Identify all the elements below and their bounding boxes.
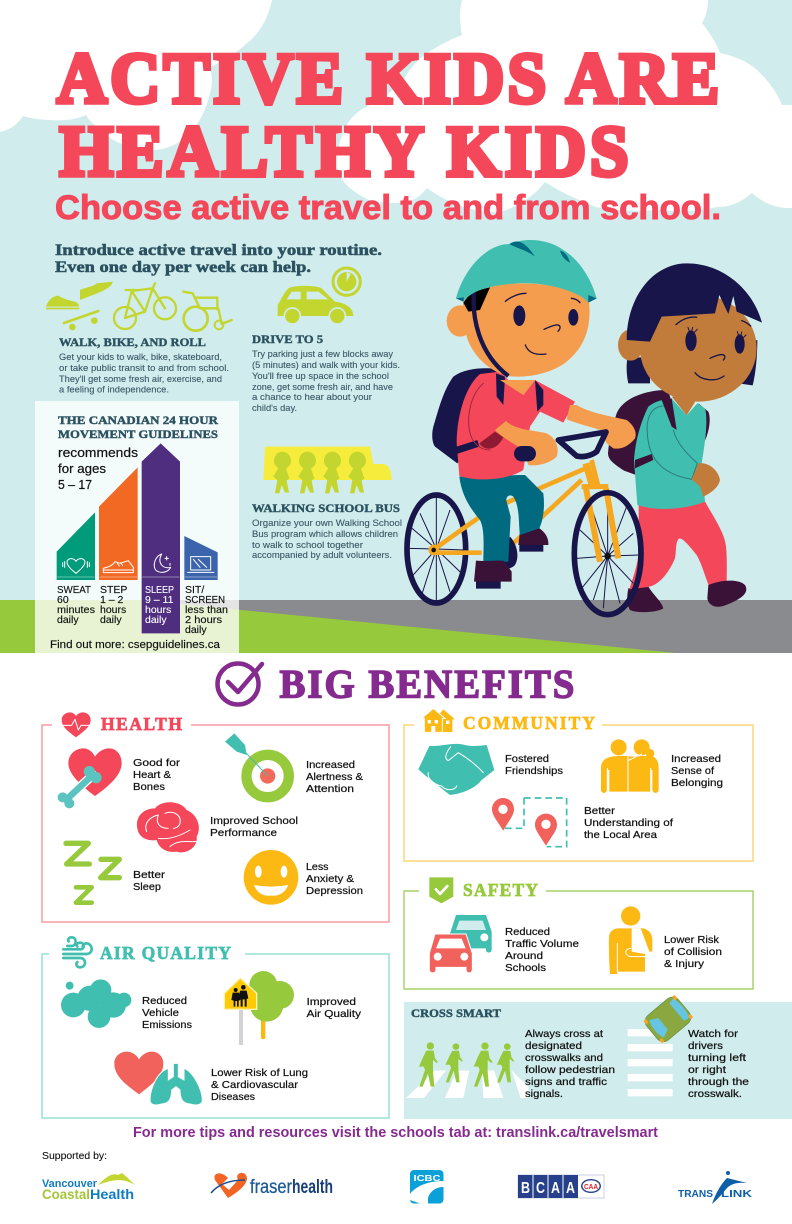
boy [432, 240, 636, 589]
air quality labels: Improved [306, 996, 356, 1008]
bicycle rear parts [407, 460, 638, 608]
health labels: Alertness & [306, 771, 363, 783]
community labels: Better [584, 805, 616, 817]
chart labels: hours [145, 604, 171, 616]
cross smart text: left: Always cross at [525, 1028, 603, 1040]
chart labels: daily [145, 614, 167, 626]
logo: fraser health: health [292, 1177, 333, 1198]
community labels: Fostered [505, 753, 549, 765]
logo: bcaa: B [521, 1180, 530, 1197]
safety labels [505, 926, 722, 974]
guidelines heading [58, 413, 218, 441]
health labels: Sleep [133, 881, 161, 893]
chart labels: SIT/ [185, 584, 204, 596]
icons: walk, bike and roll [46, 282, 232, 331]
safety labels: Lower Risk [664, 934, 720, 946]
walk, bike and roll text [59, 337, 229, 394]
chart labels: daily [100, 614, 122, 626]
logo: translink [678, 1171, 753, 1204]
health labels: Better [133, 869, 166, 881]
icon: walking school bus [263, 447, 392, 493]
health labels: Depression [306, 885, 363, 897]
logo: bcaa: A [551, 1180, 560, 1197]
health labels: Bones [133, 781, 165, 793]
drive to 5 text: a chance to hear about your [252, 392, 372, 402]
cross smart text: right: turning left [688, 1052, 746, 1064]
logo: vancouver coastal health: Coastal [42, 1186, 90, 1202]
safety heading: SAFETY [463, 880, 538, 900]
chart labels: SLEEP [145, 584, 174, 596]
health labels: Less [306, 861, 328, 873]
health labels: Attention [306, 783, 354, 795]
health heading: HEALTH [101, 714, 182, 734]
walking school bus text: WALKING SCHOOL BUS [252, 503, 400, 515]
air quality labels: Diseases [211, 1091, 255, 1103]
icon: crosswalk stripes and car [628, 994, 694, 1096]
cross smart text: left [525, 1028, 615, 1100]
logo: vancouver coastal health: Health [90, 1186, 134, 1202]
logo: translink: LINK [721, 1188, 753, 1200]
air quality labels: Vehicle [142, 1007, 179, 1019]
drive to 5 text: child's day. [252, 403, 297, 413]
walk, bike and roll text: They'll get some fresh air, exercise, and [59, 374, 222, 384]
health labels: Anxiety & [306, 873, 354, 885]
guidelines heading: THE CANADIAN 24 HOUR [58, 413, 218, 427]
icon: checkmark [218, 664, 262, 704]
cross smart text: left: crosswalks and [525, 1052, 603, 1064]
logo: vancouver coastal health: Vancouver [42, 1178, 98, 1190]
title [57, 39, 719, 192]
logo: vancouver coastal health [42, 1173, 135, 1202]
walking school bus text: Bus program which allows children [252, 529, 398, 539]
safety labels: Schools [505, 962, 546, 974]
cross smart text: right: Watch for [688, 1028, 739, 1040]
chart labels: less than [185, 604, 228, 616]
logo: icbc: ICBC [414, 1173, 440, 1183]
health labels [133, 757, 363, 897]
bicycle front and handlebar [428, 432, 641, 615]
guidelines heading: MOVEMENT GUIDELINES [58, 427, 218, 441]
title: HEALTHY KIDS [60, 112, 628, 192]
logo: icbc [410, 1170, 444, 1204]
recommends text [58, 445, 139, 492]
health labels: Good for [133, 757, 181, 769]
drive to 5 text: You'll free up space in the school [252, 371, 389, 381]
drive to 5 text [252, 334, 400, 413]
community labels: Increased [671, 753, 721, 765]
air quality labels: Emissions [142, 1019, 192, 1031]
chart labels: SWEAT [57, 584, 92, 596]
walking school bus text: Organize your own Walking School [252, 518, 402, 528]
cross smart heading: CROSS SMART [411, 1006, 501, 1020]
logo: fraser health: fraser [250, 1177, 293, 1198]
footer call to action: For more tips and resources visit the schools tab at: translink.ca/travelsmart [133, 1125, 658, 1141]
chart labels: minutes [57, 604, 95, 616]
chart labels: 60 [57, 594, 69, 606]
panel: community [404, 708, 753, 861]
chart labels: daily [185, 624, 207, 636]
walking school bus text [252, 503, 402, 560]
cross smart text: right [688, 1028, 749, 1100]
panel: air quality [42, 937, 389, 1118]
chart labels: STEP [100, 584, 127, 596]
safety labels: Traffic Volume [505, 938, 579, 950]
logo: fraser health [211, 1173, 333, 1198]
health labels: Heart & [133, 769, 171, 781]
air quality labels: Reduced [142, 995, 187, 1007]
community icons [418, 708, 659, 847]
chart labels: daily [57, 614, 79, 626]
intro heading [55, 242, 382, 276]
drive to 5 text: DRIVE TO 5 [252, 334, 323, 346]
girl [608, 263, 762, 612]
community heading: COMMUNITY [463, 713, 595, 733]
walk, bike and roll text: Get your kids to walk, bike, skateboard, [59, 352, 222, 362]
chart labels: 9 – 11 [145, 594, 174, 606]
community labels: Understanding of [584, 817, 673, 829]
health labels: Increased [306, 759, 355, 771]
walk, bike and roll text: WALK, BIKE, AND ROLL [59, 337, 206, 349]
chart labels: 2 hours [185, 614, 222, 626]
air quality labels [142, 995, 362, 1103]
icon: car and clock [278, 268, 360, 324]
find out more link: Find out more: csepguidelines.ca [50, 639, 221, 651]
chart labels [57, 584, 228, 636]
air quality labels: Air Quality [306, 1008, 362, 1020]
air quality labels: Lower Risk of Lung [211, 1067, 308, 1079]
supported by label: Supported by: [42, 1151, 107, 1162]
community labels: Sense of [671, 765, 714, 777]
logo: bcaa: A [566, 1180, 575, 1197]
community labels [505, 753, 723, 841]
recommends text: 5 – 17 [58, 477, 92, 492]
air quality heading: AIR QUALITY [100, 943, 231, 963]
subtitle: Choose active travel to and from school. [55, 189, 721, 227]
intro heading: Introduce active travel into your routine. [55, 242, 382, 259]
chart labels: SCREEN [185, 594, 225, 606]
panel: health [42, 712, 389, 922]
big benefits heading: BIG BENEFITS [280, 662, 574, 706]
hero background: sky, clouds and ground [0, 0, 792, 653]
safety icons [429, 877, 652, 974]
air quality labels: & Cardiovascular [211, 1079, 299, 1091]
drive to 5 text: (5 minutes) and walk with your kids. [252, 360, 400, 370]
chart: movement arrows [57, 443, 218, 633]
health labels: Improved School [210, 815, 298, 827]
safety labels: & Injury [664, 958, 705, 970]
walking school bus text: accompanied by adult volunteers. [252, 550, 392, 560]
panel: safety [404, 877, 753, 989]
air quality icons [61, 937, 294, 1105]
recommends text: recommends [58, 445, 139, 460]
drive to 5 text: zone, get some fresh air, and have [252, 382, 393, 392]
illustration: girl and boy with bicycle [407, 240, 762, 615]
chart labels: 1 – 2 [100, 594, 124, 606]
drive to 5 text: Try parking just a few blocks away [252, 349, 394, 359]
intro heading: Even one day per week can help. [55, 259, 311, 276]
panel: movement guidelines [35, 401, 239, 653]
walking school bus text: to walk to school together [252, 540, 363, 550]
logo: bcaa: CAA [584, 1184, 598, 1191]
logo: translink: TRANS [678, 1188, 713, 1200]
community labels: Belonging [671, 777, 723, 789]
cross smart text: right: through the [688, 1076, 749, 1088]
chart labels: hours [100, 604, 126, 616]
cross smart text: left: designated [525, 1040, 582, 1052]
community labels: Friendships [505, 765, 563, 777]
community labels: the Local Area [584, 829, 657, 841]
logo: bcaa: C [536, 1180, 545, 1197]
cross smart text: left: signals. [525, 1088, 563, 1100]
walk, bike and roll text: or take public transit to and from school. [59, 363, 229, 373]
walk, bike and roll text: a feeling of independence. [59, 384, 169, 394]
recommends text: for ages [58, 461, 106, 476]
cross smart text: right: drivers [688, 1040, 723, 1052]
panel: cross smart [404, 994, 792, 1119]
health icons [58, 712, 298, 905]
safety labels: Reduced [505, 926, 550, 938]
logo: bcaa [518, 1175, 604, 1198]
safety labels: of Collision [664, 946, 722, 958]
icon: pedestrians on crosswalk [406, 1042, 528, 1098]
health labels: Performance [210, 827, 277, 839]
title: ACTIVE KIDS ARE [57, 39, 719, 119]
safety labels: Around [505, 950, 543, 962]
cross smart text: left: follow pedestrian [525, 1064, 615, 1076]
cross smart text: left: signs and traffic [525, 1076, 607, 1088]
cross smart text: right: or right [688, 1064, 726, 1076]
cross smart text: right: crosswalk. [688, 1088, 742, 1100]
